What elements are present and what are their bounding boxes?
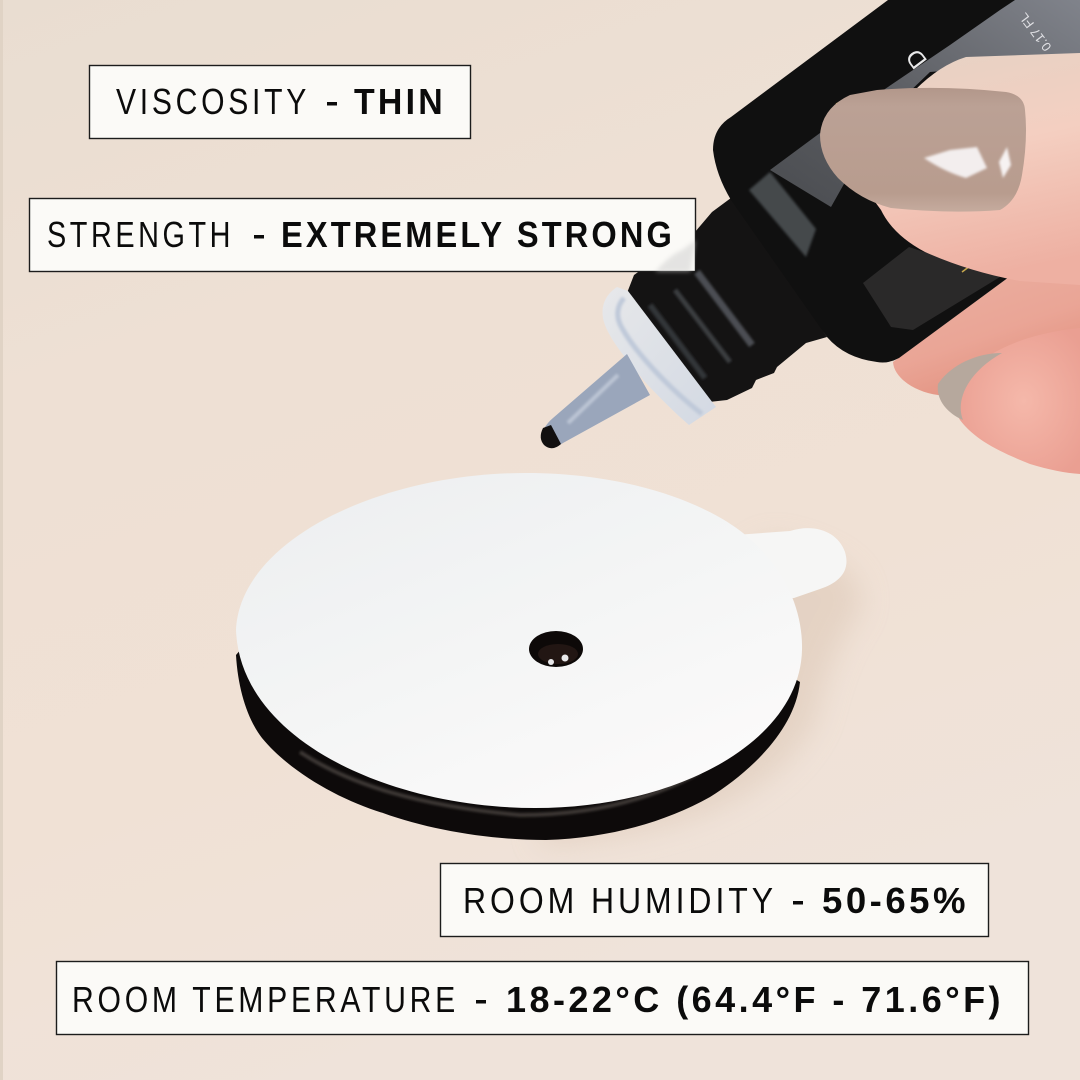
icon: thumb and nail (820, 53, 1080, 285)
bottle body (713, 0, 1080, 362)
white sticker disc (236, 473, 802, 808)
shadow under holder (540, 540, 861, 845)
label: strength: EXTREMELY STRONG (281, 214, 675, 255)
side sheen (749, 172, 816, 257)
label: strength (30, 198, 696, 272)
dark grey label panel (863, 247, 1000, 330)
side nail (938, 353, 1002, 420)
white collar ring (603, 287, 716, 425)
icon: glue holder with sticker (236, 473, 846, 840)
bottle print: D (901, 44, 933, 74)
label: strength: STRENGTH (47, 214, 234, 255)
icon: glue bottle: 0.17 FL (1016, 10, 1054, 54)
bottle neck (627, 195, 827, 402)
black glue at tip (541, 425, 561, 448)
nozzle (542, 354, 650, 447)
label: room temperature (56, 962, 1028, 1034)
nail highlights (924, 147, 987, 178)
black holder base (236, 560, 800, 840)
label: room humidity: ROOM HUMIDITY (463, 880, 777, 921)
holder rim highlight (300, 752, 700, 815)
label: viscosity (90, 66, 470, 138)
label: viscosity: THIN (354, 81, 446, 122)
label: viscosity: VISCOSITY (116, 81, 310, 122)
icon: lower finger with side nail (893, 270, 1080, 474)
sticker tab (735, 528, 846, 600)
icon: glue bottle (541, 0, 1080, 448)
label: room temperature: 18-22°C (64.4°F - 71.6°F) (506, 979, 1004, 1020)
label: room humidity (440, 864, 988, 936)
label: room temperature: ROOM TEMPERATURE (72, 979, 459, 1020)
neck thread highlights (697, 272, 752, 345)
glue drop in the centre (529, 631, 583, 667)
silver sheen band (770, 0, 1080, 207)
label: room humidity: 50-65% (822, 880, 969, 921)
